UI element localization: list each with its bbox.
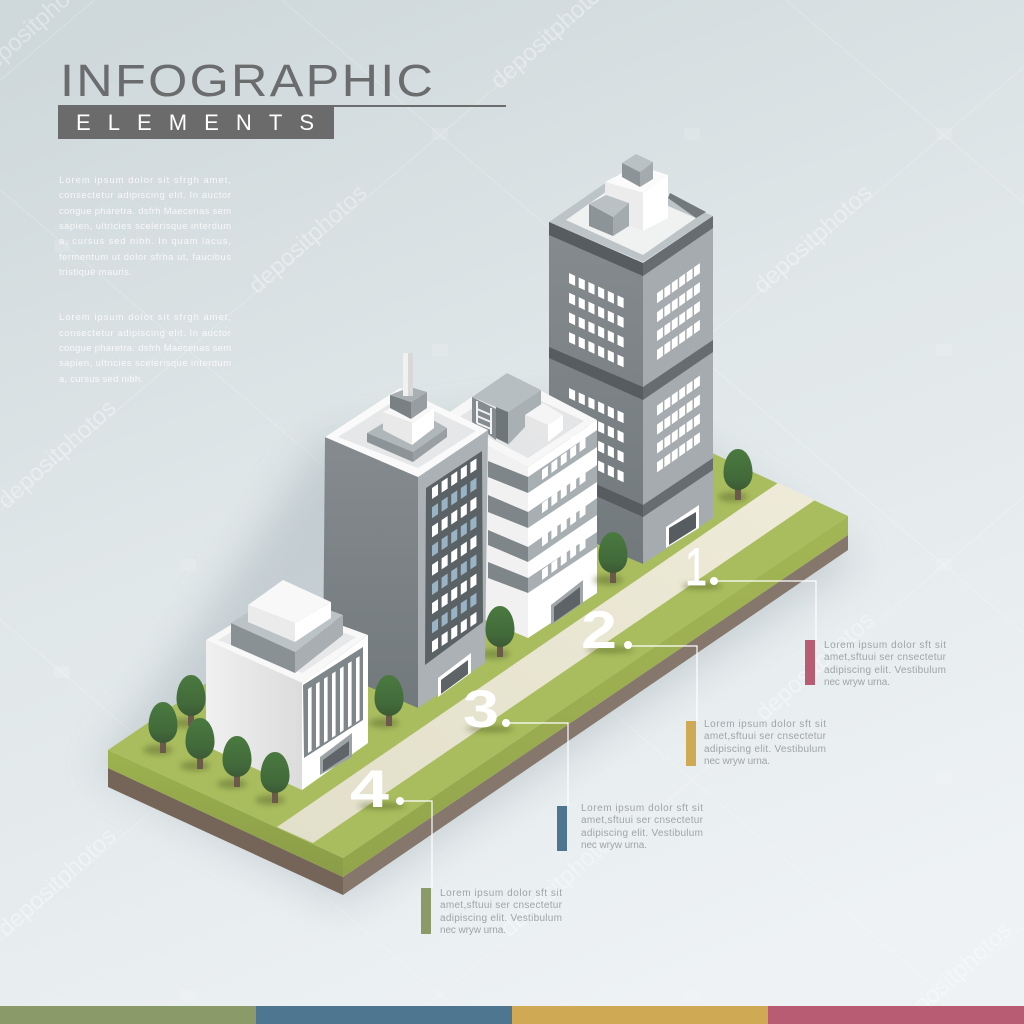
callout 4: nec wryw urna. [440,925,506,936]
middle white building [438,373,597,638]
trees beside left building [171,675,404,728]
middle left stripes [488,461,528,593]
ground board [108,407,848,895]
watermark: depositphotos [750,606,880,726]
callout 1: nec wryw urna. [824,677,890,688]
number 2 marker: 2 [581,601,617,660]
front building right face [302,635,368,790]
front building left face [206,640,302,790]
antenna [403,353,413,396]
middle right face [528,420,597,638]
callout 4: amet,sftuui ser cnsectetur [440,900,563,911]
tower windows [569,263,700,482]
watermark: depositphotos [243,179,373,299]
callout 1: amet,sftuui ser cnsectetur [824,652,947,663]
left building blue windows [432,478,476,633]
tower door [666,505,699,548]
text block: intro paragraph two: sapien, ultricies scelerisque interdum [59,357,231,368]
text block: intro paragraph one: consectetur adipiscing elit. In auctor [59,189,231,200]
number 4 marker: 4 [350,760,390,819]
tower building [549,154,713,564]
road [277,483,815,843]
callout 4 [421,888,563,936]
callout 4: adipiscing elit. Vestibulum [440,913,562,924]
text block: intro paragraph two: consectetur adipiscing elit. In auctor [59,327,231,338]
text block: intro paragraph two [59,311,231,384]
tower roof [549,175,713,262]
tower left face [549,222,643,564]
callout 2: adipiscing elit. Vestibulum [704,744,826,755]
middle roof block [472,373,563,445]
text block: intro paragraph one: a, cursus sed nibh. In quam lacus, [59,235,231,246]
left building white windows [432,458,476,653]
front building parapet [206,600,368,683]
callout 3: Lorem ipsum dolor sft sit [581,803,703,814]
left building left face [323,437,418,708]
left building door [438,653,471,697]
text block: intro paragraph one: congue pharetra. dsfrh Maecenas sem [59,205,231,216]
ladder [472,397,496,440]
callout 2: nec wryw urna. [704,756,770,767]
tower roof blocks [589,154,668,236]
board soil side [108,768,343,895]
left building right face [418,430,488,708]
callout 3: adipiscing elit. Vestibulum [581,828,703,839]
text block: intro paragraph one: fermentum ut dolor sfrha ut, faucibus [59,251,231,262]
title [58,56,506,139]
tree behind tower [718,449,752,502]
trees beside middle building [480,532,628,659]
tower right face [643,216,713,564]
left building window panel [425,451,483,665]
callout 4: Lorem ipsum dolor sft sit [440,888,562,899]
left gray building [323,353,488,708]
text block: intro paragraph two: Lorem ipsum dolor sit sfrgh amet, [59,311,231,322]
left building roof [325,388,488,477]
heading: infographic: INFOGRAPHIC [60,56,433,106]
bottom colour bar [0,1006,1024,1024]
middle door [551,580,583,625]
number 3 marker: 3 [463,680,499,739]
callout 2 [686,719,827,767]
trees in front [143,702,290,805]
board grass side [108,750,343,877]
callout 2: amet,sftuui ser cnsectetur [704,731,827,742]
middle left face [438,420,528,638]
text block: intro paragraph two: a, cursus sed nibh. [59,373,143,384]
front building white tier [248,580,331,642]
watermark: depositphotos [748,179,878,299]
middle right stripes [528,430,597,593]
front building stripes [308,656,360,753]
text block: intro paragraph one: sapien, ultricies scelerisque interdum [59,220,231,231]
front building door [320,733,352,775]
callout 1: Lorem ipsum dolor sft sit [824,640,946,651]
middle windows [542,438,586,580]
soft shadow under the board [95,400,860,905]
number 2 marker [581,601,697,721]
heading: elements [58,105,334,139]
text block: intro paragraph one: tristique mauris. [59,266,132,277]
front building gray tier [231,592,343,673]
heading: elements: ELEMENTS [76,110,314,135]
callout 1 [805,640,947,688]
callout 3 [557,803,704,851]
callout 3: nec wryw urna. [581,840,647,851]
middle roof [438,373,597,467]
board grass top [108,407,848,858]
text block: intro paragraph one [59,174,231,277]
number 1 marker [682,538,816,640]
callout 2: Lorem ipsum dolor sft sit [704,719,826,730]
tower bands [549,216,713,517]
front white building [206,580,368,790]
number 1 marker: 1 [685,538,707,597]
watermark: depositphotos [495,822,625,942]
callout 1: adipiscing elit. Vestibulum [824,665,946,676]
heading rule [58,105,506,107]
left building roof tiers [367,387,447,462]
text block: intro paragraph two: congue pharetra. dsfrh Maecenas sem [59,342,231,353]
number 3 marker [463,680,568,806]
number 4 marker [350,760,432,888]
front building window panel [303,647,363,758]
text block: intro paragraph one: Lorem ipsum dolor sit sfrgh amet, [59,174,231,185]
callout 3: amet,sftuui ser cnsectetur [581,815,704,826]
